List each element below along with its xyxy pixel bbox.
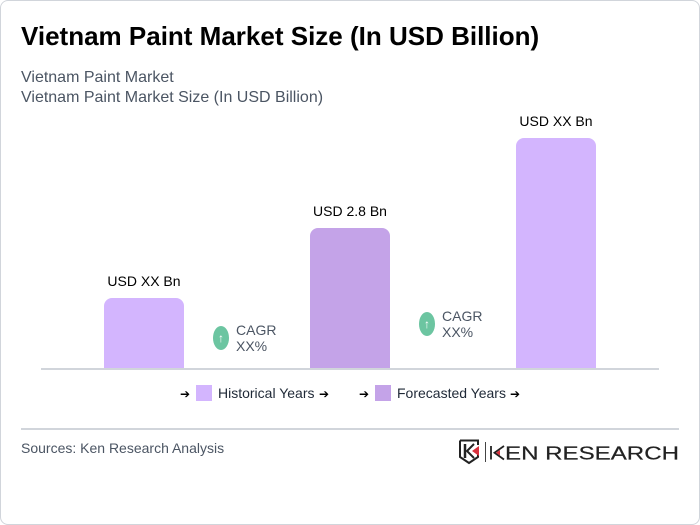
legend arrow: ➔ xyxy=(359,387,369,401)
title: Vietnam Paint Market Size (In USD Billion) xyxy=(21,21,539,51)
icon: first CAGR arrow xyxy=(213,326,229,350)
bar: first historical year xyxy=(104,298,184,368)
x axis xyxy=(41,368,659,370)
legend xyxy=(180,385,520,401)
legend arrow: ➔ xyxy=(180,387,190,401)
logo divider xyxy=(485,442,486,462)
legend label: forecasted: Forecasted Years xyxy=(397,385,506,401)
subtitle: Vietnam Paint Market xyxy=(21,69,174,86)
legend swatch: historical xyxy=(196,385,212,401)
second CAGR label: XX% xyxy=(442,324,473,340)
icon: first CAGR arrow: ↑ xyxy=(218,331,224,345)
second CAGR label xyxy=(442,308,482,340)
legend arrow: ➔ xyxy=(510,387,520,401)
icon: second CAGR arrow xyxy=(419,312,435,336)
subtitle: Vietnam Paint Market Size (In USD Billion) xyxy=(21,89,323,106)
first CAGR label xyxy=(236,322,276,354)
legend label: historical: Historical Years xyxy=(218,385,314,401)
logo wordmark: EN RESEARCH xyxy=(505,442,679,464)
bar chart xyxy=(41,113,659,370)
icon: shield mark xyxy=(460,440,479,463)
second CAGR label: CAGR xyxy=(442,308,482,324)
subtitle xyxy=(21,69,323,106)
bar label: first historical year: USD XX Bn xyxy=(107,273,181,289)
bar: middle year xyxy=(310,228,390,368)
first CAGR label: CAGR xyxy=(236,322,276,338)
bar label: final forecast year: USD XX Bn xyxy=(519,113,593,129)
first CAGR label: XX% xyxy=(236,338,267,354)
legend arrow: ➔ xyxy=(319,387,329,401)
sources text: Sources: Ken Research Analysis xyxy=(21,440,224,456)
icon: second CAGR arrow: ↑ xyxy=(424,317,430,331)
footer divider xyxy=(21,428,679,430)
bar: final forecast year xyxy=(516,138,596,368)
legend swatch: forecasted xyxy=(375,385,391,401)
logo: Ken Research xyxy=(459,440,679,464)
bar label: middle year: USD 2.8 Bn xyxy=(313,203,387,219)
